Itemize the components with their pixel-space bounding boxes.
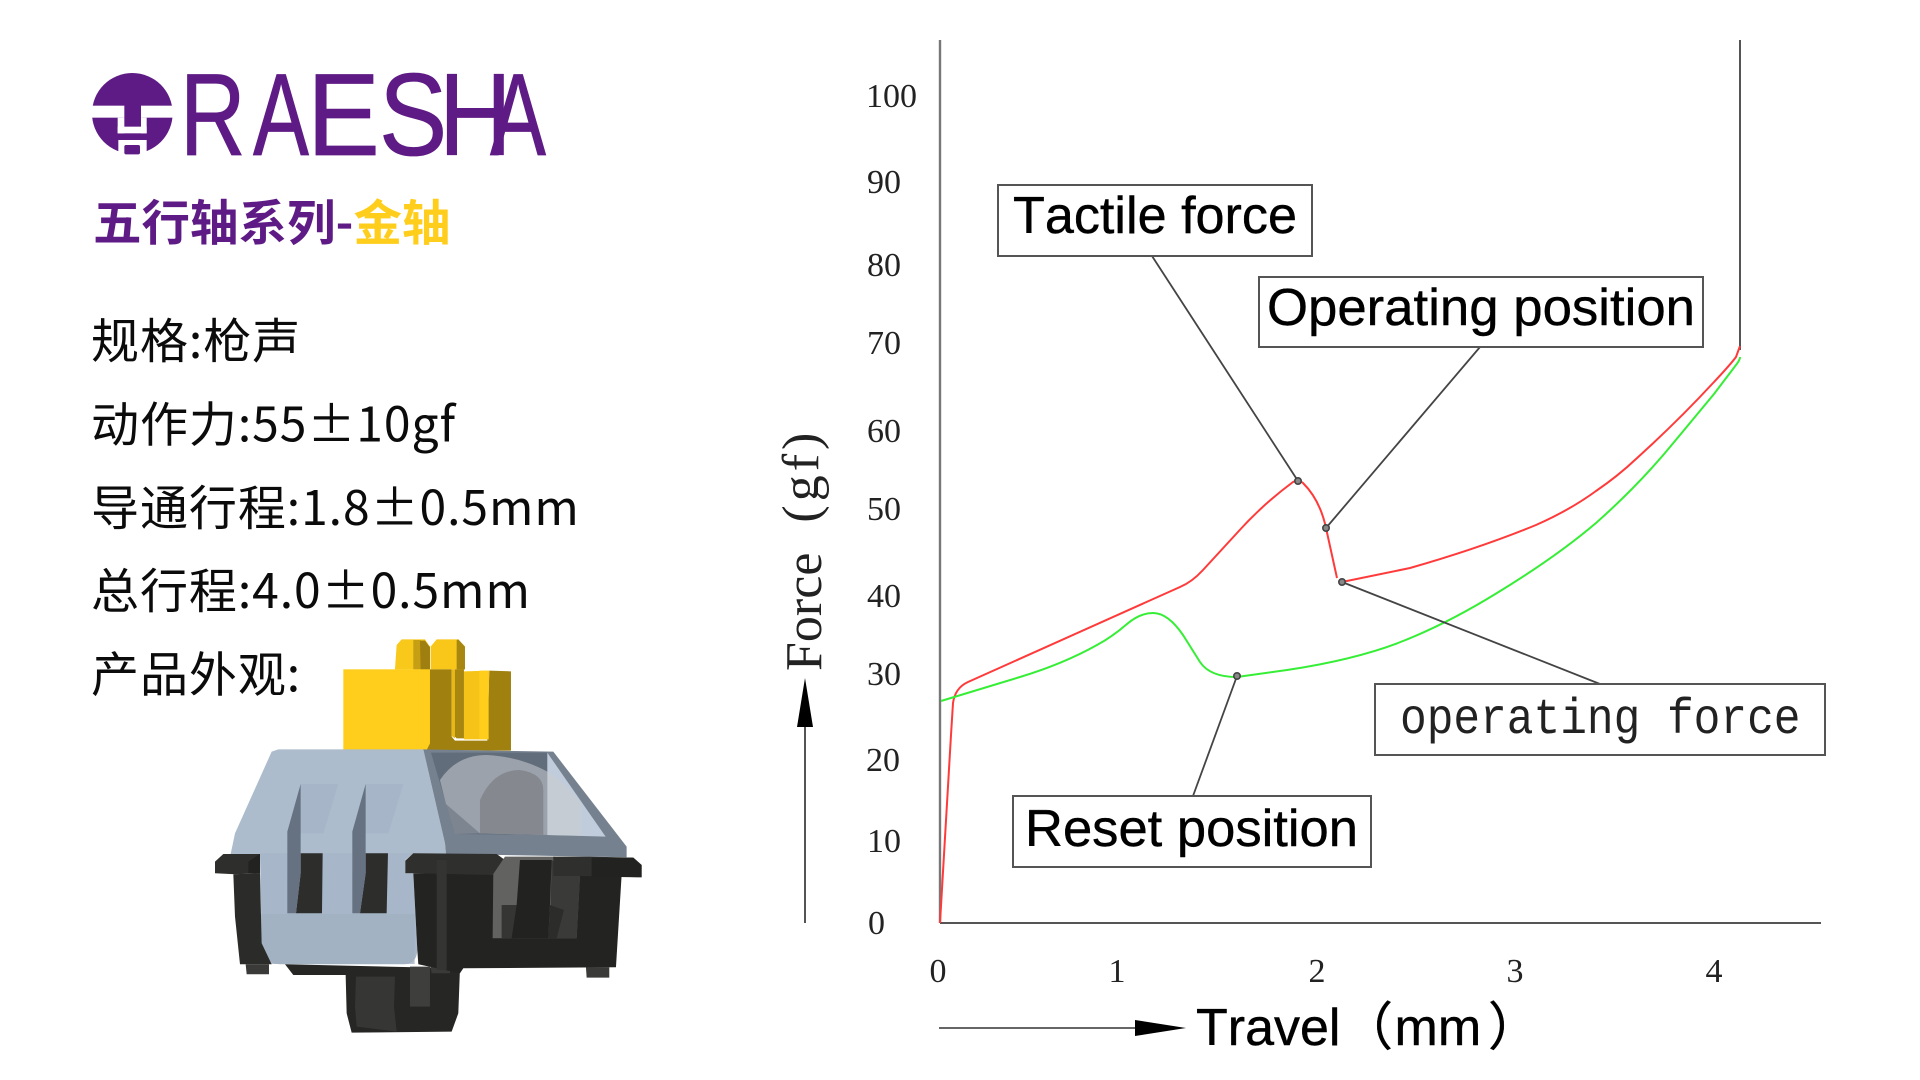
y-axis title: Force xyxy=(776,553,833,671)
logo wordmark: S xyxy=(379,50,447,181)
callout: operating force xyxy=(1339,579,1825,755)
x-axis title: Travel xyxy=(1196,999,1340,1057)
x-axis tick labels: 2 xyxy=(1308,953,1326,990)
x-axis title: （ xyxy=(1341,999,1393,1057)
housing: black base xyxy=(215,853,642,1033)
release curve: green xyxy=(941,357,1740,701)
x-axis title: ） xyxy=(1488,999,1540,1057)
callout: operating force: operating force xyxy=(1400,693,1800,749)
y-axis tick labels: 60 xyxy=(867,413,901,450)
callout: reset position: Reset position xyxy=(1025,800,1358,858)
spec: appearance: 产品外观: xyxy=(91,636,301,706)
callout: tactile force: Tactile force xyxy=(1013,187,1297,245)
callout: operating position xyxy=(1259,277,1703,531)
logo: RAESHA brand mark xyxy=(87,49,546,181)
logo wordmark: R xyxy=(180,50,246,181)
chart axes xyxy=(940,40,1821,923)
chart: force-travel curve xyxy=(773,40,1825,1057)
y-axis tick labels: 80 xyxy=(867,247,901,284)
y-axis tick labels: 50 xyxy=(867,491,901,528)
housing: clear window xyxy=(423,749,627,857)
y-axis tick labels: 40 xyxy=(867,578,901,615)
logo wordmark: H xyxy=(439,50,512,181)
spec: type: 规格:枪声 xyxy=(91,302,301,372)
text block: specifications xyxy=(91,302,580,706)
y-axis tick labels: 20 xyxy=(866,742,900,779)
x-axis tick labels: 1 xyxy=(1108,953,1126,990)
callout: operating position: Operating position xyxy=(1267,279,1695,337)
icon: round switch emblem xyxy=(87,73,179,157)
logo wordmark xyxy=(180,49,546,181)
callout: tactile force xyxy=(998,185,1312,484)
switch stem: yellow xyxy=(343,639,511,751)
spec: pre-travel: 导通行程:1.8±0.5mm xyxy=(91,469,580,539)
y-axis tick labels xyxy=(866,78,917,942)
x-axis tick labels: 4 xyxy=(1706,953,1722,990)
spec: total travel: 总行程:4.0±0.5mm xyxy=(91,552,531,622)
callout: reset position xyxy=(1013,673,1371,867)
icon: mechanical switch illustration xyxy=(215,639,642,1033)
y-axis tick labels: 100 xyxy=(866,78,917,115)
arrow: travel direction xyxy=(939,1020,1186,1036)
spec: operating force: 动作力:55±10gf xyxy=(91,386,457,456)
y-axis tick labels: 70 xyxy=(867,325,901,362)
logo wordmark: A xyxy=(253,49,309,180)
y-axis tick labels: 10 xyxy=(867,823,901,860)
y-axis title: (gf) xyxy=(773,429,830,523)
x-axis tick labels xyxy=(930,953,1722,990)
logo wordmark: E xyxy=(307,49,380,181)
x-axis tick labels: 0 xyxy=(930,953,946,990)
x-axis title: mm xyxy=(1394,999,1481,1057)
y-axis tick labels: 90 xyxy=(867,164,901,201)
logo wordmark: A xyxy=(490,49,546,180)
press curve: red xyxy=(940,346,1740,923)
y-axis tick labels: 30 xyxy=(867,656,901,693)
title: series name: 五行轴系列-金轴 xyxy=(93,184,450,254)
y-axis tick labels: 0 xyxy=(868,905,885,942)
arrow: force direction xyxy=(797,678,813,923)
housing: blue-grey top xyxy=(231,749,446,964)
x-axis tick labels: 3 xyxy=(1506,953,1524,990)
